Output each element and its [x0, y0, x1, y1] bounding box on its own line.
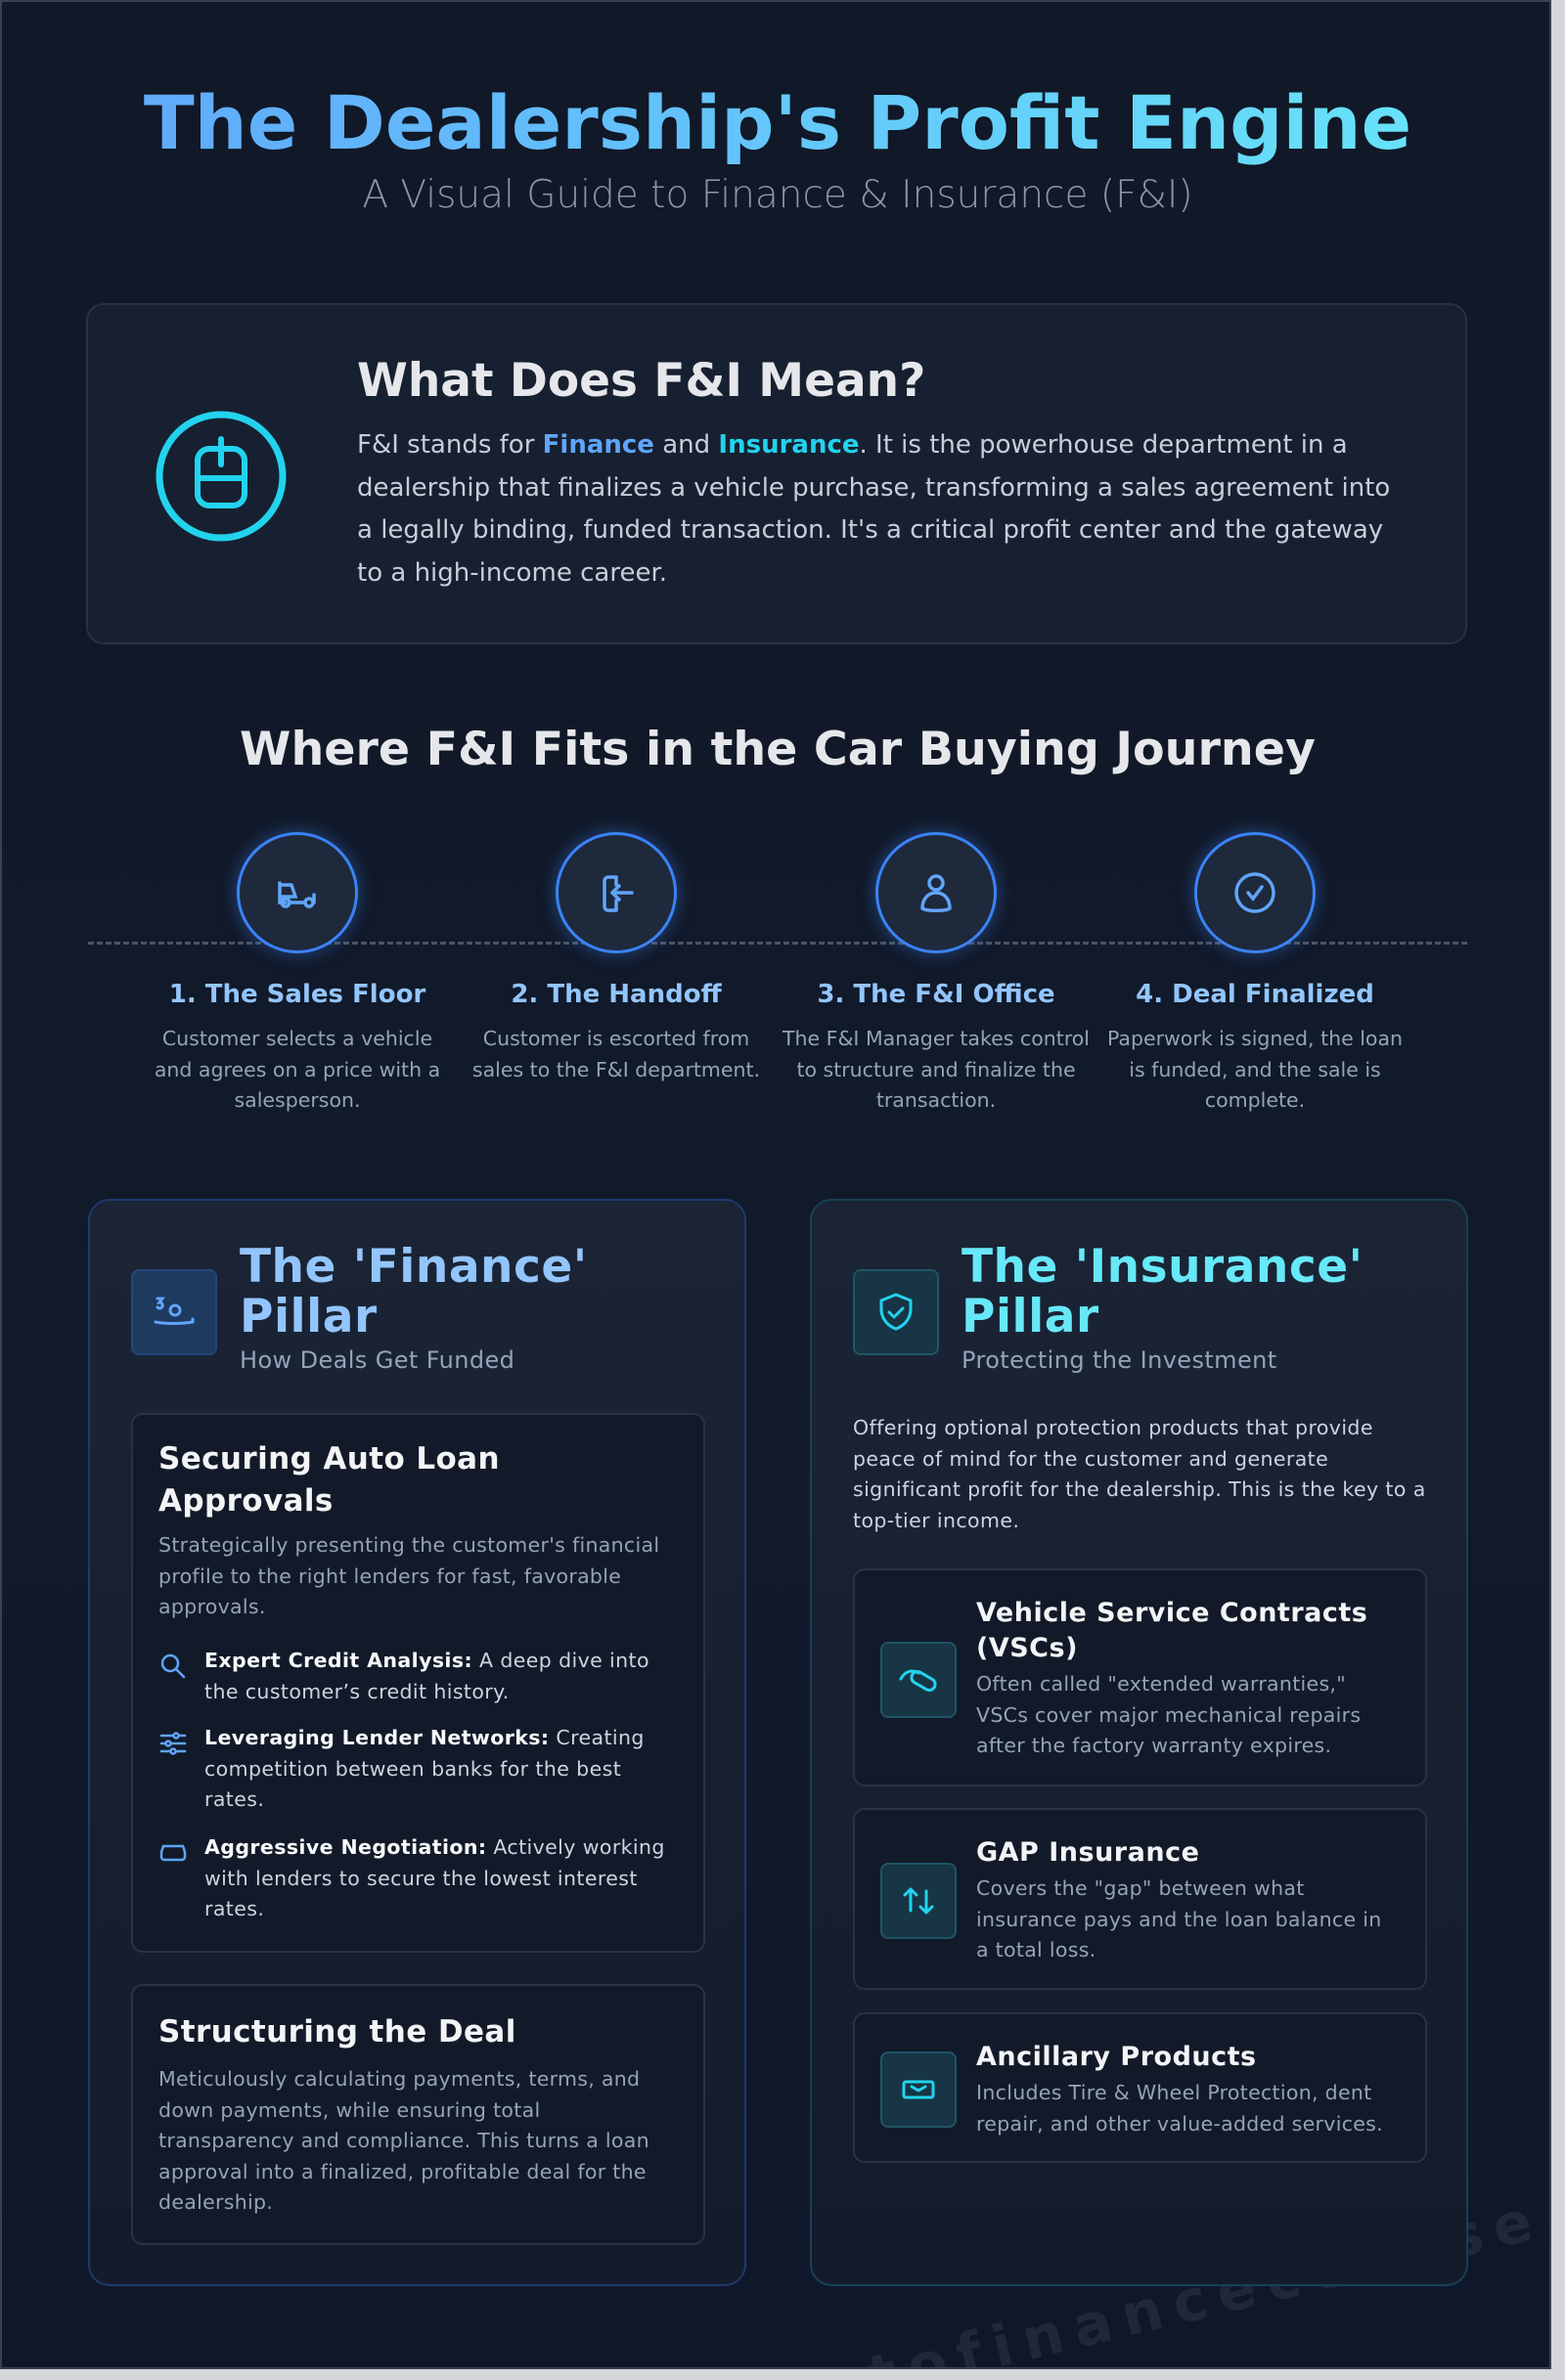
pillar title: How Deals Get Funded — [240, 1346, 514, 1374]
step 3: 3. The F&I Office — [817, 980, 1055, 1009]
step 1: 1. The Sales Floor — [169, 980, 425, 1009]
product: GAP: Covers the "gap" between what insurance pays and the loan balance in a total loss. — [976, 1876, 1382, 1961]
product: ancillary — [853, 2012, 1427, 2163]
product: ancillary: Includes Tire & Wheel Protection, dent repair, and other value-added services. — [976, 2081, 1383, 2136]
panel: insurance pillar — [810, 1199, 1468, 2286]
icon: shield — [853, 1269, 939, 1355]
step 2 — [472, 821, 760, 1081]
product: GAP — [853, 1808, 1427, 1990]
card: securing approvals: Strategically presenting the customer's financial profile to the right lenders for fast, favorable approvals. — [158, 1533, 659, 1618]
bullet: credit analysis: Expert Credit Analysis: A deep dive into the customer’s credit history. — [204, 1649, 649, 1703]
subtitle: A Visual Guide to Finance & Insurance (F&I) — [362, 173, 1193, 217]
step 4: 4. Deal Finalized — [1136, 980, 1374, 1009]
icon: sales floor — [237, 832, 358, 953]
panel: what does F&I mean — [86, 303, 1467, 644]
pillar title: The 'Insurance' — [961, 1240, 1364, 1294]
pillar title: The 'Finance' — [240, 1240, 588, 1294]
card: securing approvals: Securing Auto Loan Approvals — [158, 1441, 500, 1519]
pillar title: Pillar — [240, 1290, 378, 1344]
text block: Offering optional protection products that provide peace of mind for the customer and generate significant profit for the dealership. This is the key to a top-tier income. — [853, 1416, 1426, 1531]
step 3 — [782, 821, 1090, 1112]
step 1 — [155, 821, 440, 1112]
icon: person — [875, 832, 997, 953]
product: ancillary: Ancillary Products — [976, 2042, 1257, 2072]
step 2: 2. The Handoff — [511, 980, 722, 1009]
step 3: The F&I Manager takes control to structure and finalize the transaction. — [782, 1027, 1090, 1112]
product: VSC: Often called "extended warranties," VSCs cover major mechanical repairs after the factory warranty expires. — [976, 1672, 1361, 1757]
step 4: Paperwork is signed, the loan is funded, and the sale is complete. — [1107, 1027, 1403, 1112]
product: VSC: Vehicle Service Contracts (VSCs) — [976, 1598, 1367, 1663]
product: VSC — [853, 1568, 1427, 1786]
card: structuring the deal — [131, 1984, 705, 2245]
pillar title: Pillar — [961, 1290, 1099, 1344]
step 4 — [1107, 821, 1403, 1112]
icon: check — [1194, 832, 1316, 953]
icon: finance — [131, 1269, 217, 1355]
card: structuring the deal: Structuring the Deal — [158, 2014, 516, 2049]
heading: journey: Where F&I Fits in the Car Buying Journey — [240, 723, 1316, 776]
title: The Dealership's Profit Engine — [144, 79, 1411, 166]
step 1: Customer selects a vehicle and agrees on a price with a salesperson. — [155, 1027, 440, 1112]
card: structuring the deal: Meticulously calculating payments, terms, and down payments, while ensuring total transparency and compliance. This turns a loan approval into a finalized, profitable deal for the dealership. — [158, 2067, 649, 2214]
pillar title — [240, 1240, 588, 1374]
step 2: Customer is escorted from sales to the F&I department. — [472, 1027, 760, 1081]
pillar title: Protecting the Investment — [961, 1346, 1277, 1374]
bullet: lender networks: Leveraging Lender Networks: Creating competition between banks for the best rates. — [204, 1726, 645, 1811]
pillar title — [961, 1240, 1364, 1374]
bullet: negotiation: Aggressive Negotiation: Actively working with lenders to secure the lowest interest rates. — [204, 1835, 665, 1920]
card: securing approvals — [131, 1413, 705, 1953]
icon: circle badge — [156, 411, 286, 542]
product: GAP: GAP Insurance — [976, 1837, 1199, 1868]
panel: finance pillar — [88, 1199, 746, 2286]
text block: F&I stands for Finance and Insurance. It is the powerhouse department in a dealership that finalizes a vehicle purchase, transforming a sales agreement into a legally binding, funded transaction. It's a critical profit center and the gateway to a high-income career. — [357, 430, 1390, 587]
icon: handoff — [556, 832, 677, 953]
heading: What Does F&I Mean? — [357, 354, 925, 408]
